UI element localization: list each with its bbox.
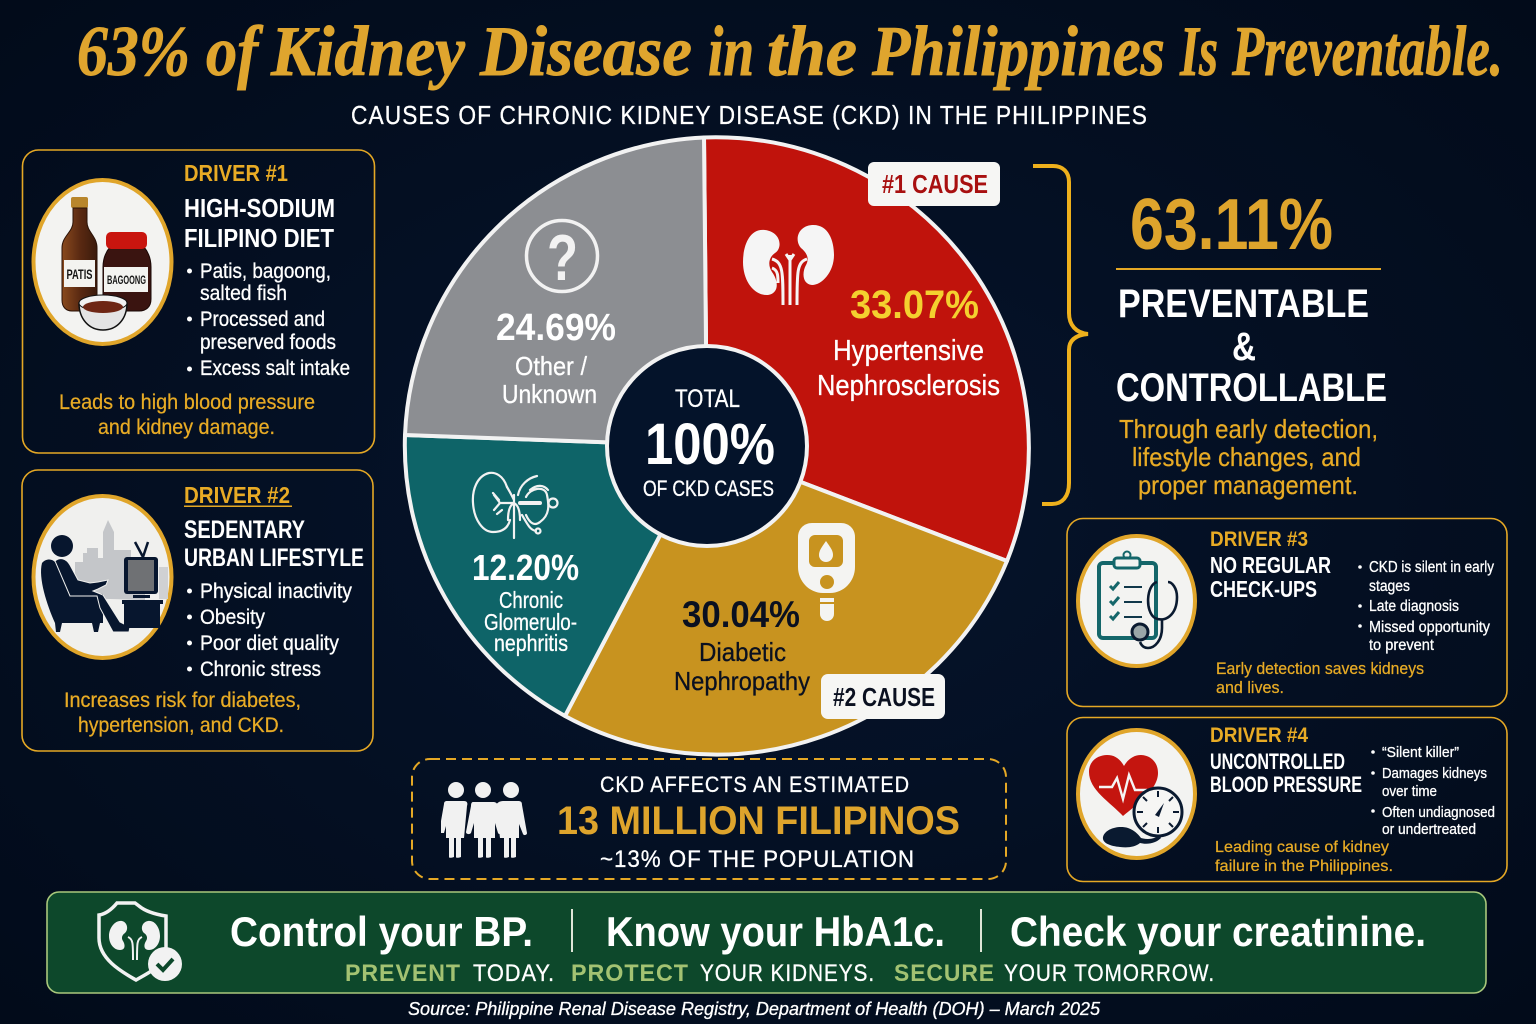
center total: OF CKD CASES <box>643 476 774 501</box>
heading: sedentary lifestyle <box>184 516 364 572</box>
heading: uncontrolled blood pressure: DRIVER #4 <box>1210 724 1308 747</box>
label: diabetic value: 30.04% <box>682 594 800 635</box>
segment: other or unknown <box>405 138 707 446</box>
heading: high-sodium diet: HIGH-SODIUM <box>184 193 335 223</box>
stat: 63.11% preventable: 63.11% <box>1130 185 1333 265</box>
bullet list: diet: Processed and <box>200 308 325 331</box>
text: affected population: CKD AFFECTS AN ESTIMATED <box>600 772 910 797</box>
stat: 63.11% preventable: proper management. <box>1138 470 1358 500</box>
badge: #2 cause <box>821 674 945 719</box>
icon: shield with kidneys <box>99 903 182 981</box>
heading: driver 2: DRIVER #2 <box>184 482 290 508</box>
text: affected population <box>557 772 960 873</box>
heading: high-sodium diet: FILIPINO DIET <box>184 223 334 253</box>
callout: diet consequence <box>59 391 315 439</box>
bullet list: diet: Excess salt intake <box>200 357 350 380</box>
heading: sedentary lifestyle: URBAN LIFESTYLE <box>184 544 364 572</box>
icon: glomerulus kidney <box>473 473 558 538</box>
heading: no regular check-ups <box>1210 528 1331 602</box>
bullet list: lifestyle: Physical inactivity <box>200 580 352 603</box>
label: hypertensive value: Nephrosclerosis <box>817 370 1000 402</box>
bullet list: check-ups: Missed opportunity <box>1369 619 1490 636</box>
panel: driver 1 <box>22 150 374 453</box>
callout: lifestyle consequence: hypertension, and CKD. <box>78 714 284 737</box>
bullet list: lifestyle: Chronic stress <box>200 658 321 681</box>
heading: no regular check-ups: NO REGULAR <box>1210 552 1331 578</box>
label: glomerulonephritis value: nephritis <box>494 630 568 656</box>
bullet list: check-ups: to prevent <box>1369 637 1435 654</box>
center total: 100% <box>645 412 775 477</box>
icon: patis bottle, bagoong jar and bowl: BAGOONG <box>107 275 146 287</box>
title: Is <box>1179 13 1218 91</box>
title: the <box>767 13 857 91</box>
callout: diet consequence: Leads to high blood pressure <box>59 391 315 414</box>
badge: #2 cause: #2 CAUSE <box>833 682 935 712</box>
text: prevent protect secure: TODAY. <box>473 960 555 987</box>
bullet list: check-ups: stages <box>1369 578 1410 595</box>
stat: 63.11% preventable: lifestyle changes, and <box>1132 442 1361 472</box>
callout: lifestyle consequence: Increases risk for diabetes, <box>64 689 301 712</box>
icon: patis bottle, bagoong jar and bowl <box>34 180 172 344</box>
title: 63% <box>77 13 190 91</box>
label: diabetic value <box>674 594 810 696</box>
title: Disease <box>479 13 692 91</box>
callout: early detection: and lives. <box>1216 678 1284 697</box>
bullet list: diet: salted fish <box>200 282 287 305</box>
arrow: bracket <box>1033 166 1088 504</box>
label: glomerulonephritis value: 12.20% <box>472 547 579 588</box>
panel: driver 3 <box>1067 518 1507 706</box>
icon: clipboard and stethoscope <box>1078 536 1195 666</box>
heading: uncontrolled blood pressure: BLOOD PRESSURE <box>1210 772 1362 797</box>
callout: leading cause: Leading cause of kidney <box>1215 839 1389 856</box>
text: prevent protect secure: PROTECT <box>571 960 689 987</box>
title: in <box>708 13 754 91</box>
text: prevent protect secure: YOUR TOMORROW. <box>1004 960 1215 987</box>
label: other value <box>496 307 616 409</box>
center total: TOTAL <box>675 385 740 413</box>
panel: driver 2 <box>22 470 373 751</box>
bullet list: check-ups: CKD is silent in early <box>1369 559 1494 576</box>
bullet list: lifestyle: Poor diet quality <box>200 632 339 655</box>
segment: chronic glomerulonephritis <box>405 435 707 716</box>
panel: driver 4 <box>1067 718 1507 882</box>
bullet list: lifestyle <box>187 580 352 681</box>
stat: 63.11% preventable: CONTROLLABLE <box>1116 366 1387 410</box>
label: glomerulonephritis value: Glomerulo- <box>484 609 577 635</box>
heading: uncontrolled blood pressure <box>1210 724 1362 797</box>
bullet list: blood pressure: Often undiagnosed <box>1382 805 1495 821</box>
label: diabetic value: Diabetic <box>699 637 786 667</box>
bullet list: blood pressure: “Silent killer” <box>1382 745 1459 761</box>
badge: #1 cause <box>868 162 1000 206</box>
bullet list: blood pressure <box>1371 745 1495 838</box>
subtitle: CAUSES OF CHRONIC KIDNEY DISEASE (CKD) IN THE PHILIPPINES <box>351 100 1148 130</box>
label: hypertensive value <box>817 283 1000 402</box>
text: affected population: 13 MILLION FILIPINOS <box>557 799 960 843</box>
text: three actions: Control your BP. <box>230 908 533 955</box>
center total <box>607 346 807 546</box>
chart: CKD causes pie <box>405 137 1029 755</box>
label: hypertensive value: Hypertensive <box>833 335 984 367</box>
icon: heart and blood pressure gauge <box>1078 730 1195 858</box>
bullet list: blood pressure: or undertreated <box>1382 822 1476 838</box>
callout: early detection: Early detection saves kidneys <box>1216 659 1424 678</box>
bullet list: diet: Patis, bagoong, <box>200 260 331 283</box>
text: prevent protect secure <box>345 960 1215 987</box>
heading: high-sodium diet <box>184 193 335 253</box>
source note: Source: Philippine Renal Disease Registry, Department of Health (DOH) – March 2025 <box>408 999 1101 1019</box>
bullet list: diet <box>187 260 350 380</box>
label: other value: Unknown <box>502 379 597 409</box>
segment: diabetic nephropathy <box>565 446 1007 755</box>
text: affected population: ~13% OF THE POPULATION <box>600 846 915 873</box>
icon: patis bottle, bagoong jar and bowl: PATIS <box>66 267 92 282</box>
heading: no regular check-ups: DRIVER #3 <box>1210 528 1308 551</box>
bullet list: blood pressure: Damages kidneys <box>1382 766 1487 782</box>
label: hypertensive value: 33.07% <box>850 283 979 327</box>
icon: kidneys <box>743 225 834 305</box>
heading: sedentary lifestyle: SEDENTARY <box>184 516 305 544</box>
banner: call to action <box>47 892 1486 993</box>
icon: glucose meter <box>798 523 855 621</box>
text: prevent protect secure: SECURE <box>894 960 995 987</box>
callout: early detection <box>1216 659 1424 697</box>
text: prevent protect secure: PREVENT <box>345 960 461 987</box>
callout: diet consequence: and kidney damage. <box>98 416 275 439</box>
bullet list: check-ups: Late diagnosis <box>1369 598 1459 615</box>
stat box: 13 million Filipinos <box>412 759 1006 879</box>
bullet list: blood pressure: over time <box>1382 784 1437 800</box>
icon: question mark: ? <box>547 221 578 294</box>
callout: lifestyle consequence <box>64 689 301 737</box>
label: glomerulonephritis value: Chronic <box>499 587 563 613</box>
label: other value: 24.69% <box>496 307 616 349</box>
text: three actions: Check your creatinine. <box>1010 908 1426 955</box>
heading: uncontrolled blood pressure: UNCONTROLLED <box>1210 749 1345 774</box>
stat: 63.11% preventable <box>1116 185 1387 500</box>
segment: hypertensive nephrosclerosis <box>704 137 1029 561</box>
text: three actions: Know your HbA1c. <box>606 908 945 955</box>
label: other value: Other / <box>515 351 588 381</box>
bullet list: lifestyle: Obesity <box>200 606 265 629</box>
label: glomerulonephritis value <box>472 547 579 656</box>
heading: no regular check-ups: CHECK-UPS <box>1210 576 1317 602</box>
text: prevent protect secure: YOUR KIDNEYS. <box>700 960 875 987</box>
callout: leading cause <box>1215 839 1393 875</box>
text: three actions <box>230 908 1426 955</box>
bullet list: diet: preserved foods <box>200 331 336 354</box>
icon: three people <box>441 782 527 858</box>
badge: #1 cause: #1 CAUSE <box>882 169 988 199</box>
icon: question mark <box>526 220 598 294</box>
label: diabetic value: Nephropathy <box>674 666 810 696</box>
title: Philippines <box>871 13 1165 91</box>
heading: driver 1: DRIVER #1 <box>184 160 288 186</box>
icon: person on chair watching TV <box>34 496 172 658</box>
stat: 63.11% preventable: PREVENTABLE <box>1118 282 1369 326</box>
title: Kidney <box>270 13 465 91</box>
title <box>77 13 1503 91</box>
stat: 63.11% preventable: Through early detection, <box>1119 414 1378 444</box>
stat: 63.11% preventable: & <box>1232 325 1256 369</box>
title: of <box>206 13 264 91</box>
callout: leading cause: failure in the Philippines. <box>1215 858 1393 875</box>
bullet list: check-ups <box>1358 559 1494 654</box>
